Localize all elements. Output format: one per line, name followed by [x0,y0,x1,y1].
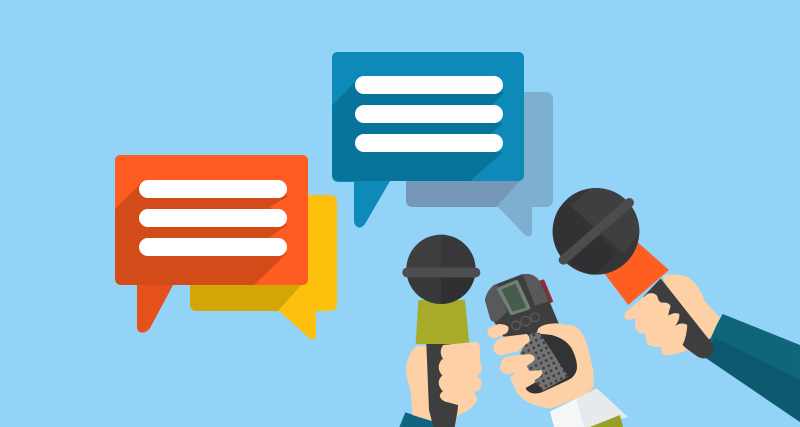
recorder side button [539,279,553,304]
left microphone and hand [399,233,482,427]
blue bubble text lines [355,76,503,152]
recorder side panels [485,284,507,322]
mic handle [426,343,458,427]
mic collar [604,242,669,305]
fingers [439,342,482,416]
back blue speech bubble [406,92,553,236]
shirt cuff and sleeve [550,388,628,427]
cuff [550,388,628,427]
recorder buttons [512,313,539,330]
right microphone and hand [550,183,800,422]
fingers [487,324,542,398]
recorder body [485,274,560,337]
back yellow speech bubble [190,195,337,339]
mic head [405,233,478,304]
back of hand [663,274,720,347]
front orange speech bubble [115,155,308,332]
sleeve [705,314,800,422]
palm [406,345,470,421]
olive sleeve [590,415,623,427]
voice recorder and hand [485,274,594,408]
mic head [552,188,640,275]
illustration [115,52,800,427]
palm [510,323,594,408]
recorder speaker grille [520,333,568,391]
recorder lower body [523,333,577,394]
mic handle [643,278,714,358]
front blue speech bubble [332,52,524,228]
orange bubble text lines [139,180,287,256]
sleeve [399,412,433,427]
mic collar [416,300,469,344]
fingers [624,293,688,355]
recorder screen [497,280,530,315]
